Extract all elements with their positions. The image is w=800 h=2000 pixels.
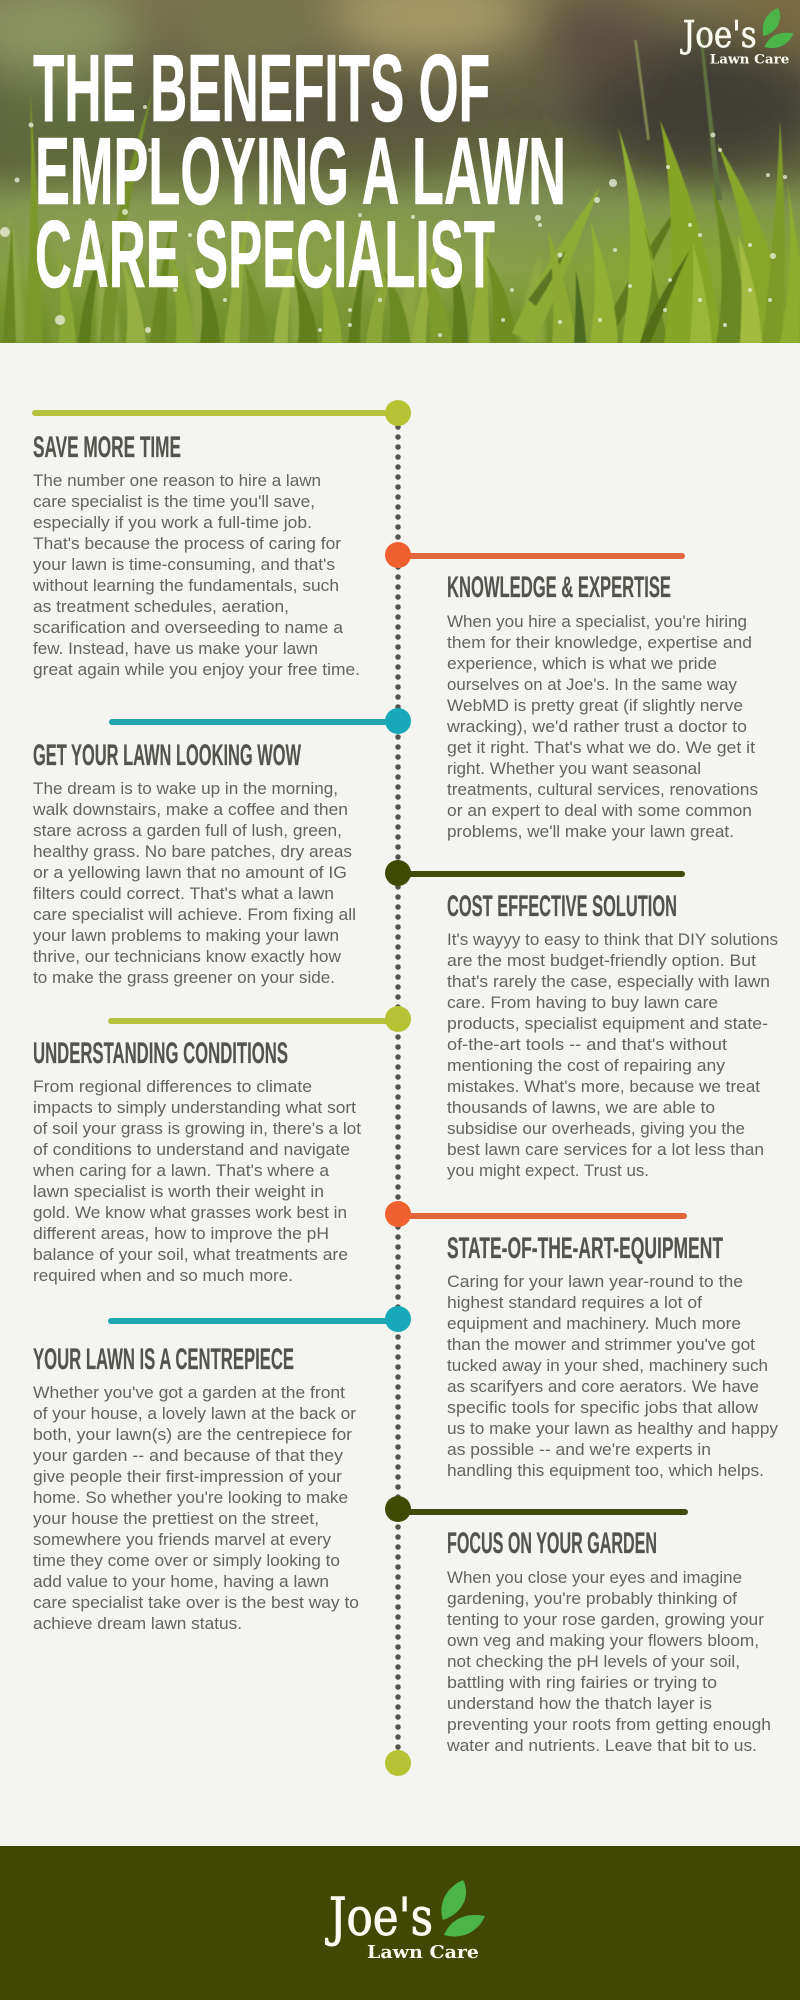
title (33, 35, 566, 308)
body text: different areas, how to improve the pH (33, 1224, 329, 1243)
body text: your house the prettiest on the street, (33, 1509, 319, 1528)
section: get your lawn looking wow (32, 708, 411, 987)
body text: care specialist is the time you'll save, (33, 492, 315, 511)
body text: both, your lawn(s) are the centrepiece for (33, 1425, 352, 1444)
body text: especially if you work a full-time job. (33, 513, 312, 532)
logo: Joe's Lawn Care header: Lawn Care (710, 52, 789, 67)
body text: as possible -- and we're experts in (447, 1440, 711, 1459)
body text: subsidise our overheads, giving you the (447, 1119, 745, 1138)
connector and node (385, 860, 685, 886)
body text: when caring for a lawn. That's where a (32, 1161, 330, 1180)
body text: not checking the pH levels of your soil, (447, 1652, 740, 1671)
body text: mistakes. What's more, because we treat (447, 1077, 760, 1096)
header panel: grass photo with title and logo (0, 0, 800, 355)
connector and node (109, 708, 411, 734)
connector and node (108, 1006, 411, 1032)
body text: preventing your roots from getting enough (447, 1715, 771, 1734)
body text: home. So whether you're looking to make (33, 1488, 348, 1507)
body text: few. Instead, have us make your lawn (33, 639, 318, 658)
body text: ourselves on at Joe's. In the same way (447, 675, 737, 694)
body text: of soil your grass is growing in, there's a lot (33, 1119, 361, 1138)
water droplets (0, 105, 787, 337)
photo: blurred garden and dewy grass (0, 0, 800, 355)
connector and node (385, 1496, 688, 1522)
body text: give people their first-impression of your (33, 1467, 342, 1486)
body text: The dream is to wake up in the morning, (33, 779, 338, 798)
soft background blades (14, 243, 666, 343)
body text (447, 930, 778, 1180)
body text (33, 1383, 359, 1633)
heading: SAVE MORE TIME (33, 431, 181, 464)
body text: mentioning the cost of repairing any (447, 1056, 726, 1075)
body text: handling this equipment too, which helps. (447, 1461, 764, 1480)
body text: without learning the fundamentals, such (32, 576, 339, 595)
body text: understand how the thatch layer is (447, 1694, 712, 1713)
body text: than the mower and strimmer you've got (447, 1335, 755, 1354)
body text: them for their knowledge, expertise and (447, 633, 752, 652)
body text: you might expect. Trust us. (447, 1161, 649, 1180)
body text: tucked away in your shed, machinery such (447, 1356, 768, 1375)
body text: When you close your eyes and imagine (447, 1568, 742, 1587)
body text: add value to your home, having a lawn (33, 1572, 329, 1591)
body text: filters could correct. That's what a lawn (33, 884, 334, 903)
body text: equipment and machinery. Much more (447, 1314, 741, 1333)
body text: impacts to simply understanding what sort (33, 1098, 356, 1117)
body text: water and nutrients. Leave that bit to us. (446, 1736, 757, 1755)
section: cost effective solution (385, 860, 778, 1180)
body text: achieve dream lawn status. (33, 1614, 242, 1633)
body text: care specialist take over is the best way to (33, 1593, 359, 1612)
body text: wracking), we'd rather trust a doctor to (446, 717, 747, 736)
body text: healthy grass. No bare patches, dry areas (33, 842, 352, 861)
body text: or an expert to deal with some common (447, 801, 752, 820)
body text: care specialist will achieve. From fixing all (33, 905, 356, 924)
body text: lawn specialist is worth their weight in (33, 1182, 324, 1201)
body text: own veg and making your flowers bloom, (447, 1631, 759, 1650)
heading: UNDERSTANDING CONDITIONS (33, 1037, 288, 1070)
body text: get it right. That's what we do. We get it (447, 738, 755, 757)
body text: to make the grass greener on your side. (33, 968, 335, 987)
body text: highest standard requires a lot of (447, 1293, 702, 1312)
body text: thrive, our technicians know exactly how (33, 947, 342, 966)
body text: scarification and overseeding to name a (33, 618, 344, 637)
body text: your garden -- and because of that they (33, 1446, 344, 1465)
body text: problems, we'll make your lawn great. (447, 822, 734, 841)
body text (446, 612, 758, 841)
heading: GET YOUR LAWN LOOKING WOW (33, 739, 301, 772)
body text: treatments, cultural services, renovations (447, 780, 758, 799)
body text (32, 471, 360, 679)
connector and node (32, 400, 411, 426)
section: your lawn is a centrepiece (33, 1306, 411, 1633)
section: knowledge and expertise (385, 542, 758, 841)
body text: products, specialist equipment and state- (447, 1014, 768, 1033)
body text: tenting to your rose garden, growing your (447, 1610, 764, 1629)
body text: stare across a garden full of lush, green, (33, 821, 342, 840)
connector and node (385, 542, 685, 568)
body text: gardening, you're probably thinking of (447, 1589, 737, 1608)
body text: thousands of lawns, we are able to (447, 1098, 715, 1117)
section: save more time (32, 400, 411, 679)
body text (32, 779, 356, 987)
body text: as scarifyers and core aerators. We have (447, 1377, 759, 1396)
logo: Joe's Lawn Care footer: Lawn Care (367, 1942, 479, 1963)
logo: Joe's Lawn Care footer: Joe's (325, 1888, 433, 1948)
body text: specific tools for specific jobs that allow (447, 1398, 759, 1417)
body text: us to make your lawn as healthy and happy (447, 1419, 778, 1438)
body text: balance of your soil, what treatments are (33, 1245, 348, 1264)
body text: of your house, a lovely lawn at the back or (33, 1404, 356, 1423)
body text: best lawn care services for a lot less than (447, 1140, 764, 1159)
body text (32, 1077, 361, 1285)
body text: Caring for your lawn year-round to the (447, 1272, 743, 1291)
connector and node (108, 1306, 411, 1332)
body text: Whether you've got a garden at the front (33, 1383, 345, 1402)
body text: that's rarely the case, especially with lawn (447, 972, 770, 991)
section: understanding conditions (32, 1006, 411, 1285)
footer band (0, 1846, 800, 2000)
body text: It's wayyy to easy to think that DIY solutions (447, 930, 778, 949)
body text: or a yellowing lawn that no amount of IG (33, 863, 347, 882)
body text: gold. We know what grasses work best in (33, 1203, 347, 1222)
section: state-of-the-art equipment (385, 1201, 778, 1480)
section: focus on your garden (385, 1496, 771, 1755)
body text: From regional differences to climate (33, 1077, 312, 1096)
body text: When you hire a specialist, you're hiring (447, 612, 747, 631)
timeline end node (385, 1750, 411, 1776)
body text: That's because the process of caring for (33, 534, 341, 553)
body text: right. Whether you want seasonal (447, 759, 701, 778)
logo: Joe's Lawn Care header (679, 8, 794, 67)
body text: battling with ring fairies or trying to (447, 1673, 717, 1692)
body text: time they come over or simply looking to (33, 1551, 340, 1570)
body text: your lawn problems to making your lawn (33, 926, 339, 945)
timeline: dotted spine (395, 417, 401, 1757)
body text: of-the-art tools -- and that's without (447, 1035, 727, 1054)
logo: Joe's Lawn Care header: Joe's (679, 13, 757, 56)
logo: Joe's Lawn Care footer (325, 1880, 485, 1963)
body text: great again while you enjoy your free time. (33, 660, 360, 679)
connector and node (385, 1201, 687, 1227)
body text: required when and so much more. (33, 1266, 293, 1285)
body text (446, 1568, 771, 1755)
body text: somewhere you friends marvel at every (33, 1530, 331, 1549)
body text: your lawn is time-consuming, and that's (33, 555, 335, 574)
body text (447, 1272, 778, 1480)
body text: experience, which is what we pride (447, 654, 717, 673)
sharp grass blades (3, 40, 800, 343)
body text: are the most budget-friendly option. But (447, 951, 756, 970)
body text: care. From having to buy lawn care (447, 993, 718, 1012)
body text: The number one reason to hire a lawn (33, 471, 321, 490)
body text: WebMD is pretty great (if slightly nerve (447, 696, 743, 715)
body text: of conditions to understand and navigate (33, 1140, 350, 1159)
body text: walk downstairs, make a coffee and then (32, 800, 348, 819)
body text: as treatment schedules, aeration, (33, 597, 289, 616)
heading: YOUR LAWN IS A CENTREPIECE (33, 1343, 294, 1376)
